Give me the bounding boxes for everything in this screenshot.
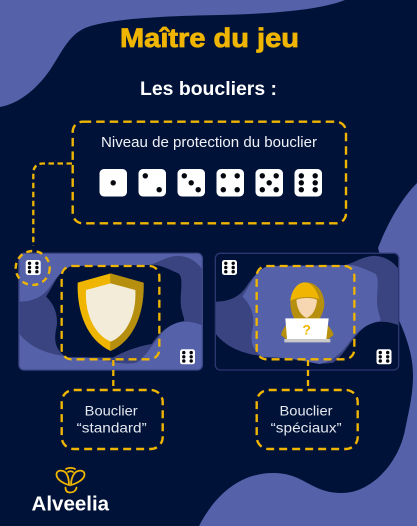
callout: special shield — [257, 390, 358, 449]
panel: special shield card — [215, 253, 399, 370]
icon: die badge top-left — [16, 251, 50, 285]
logo: Alveelia: Alveelia — [32, 494, 110, 516]
panel heading: Niveau de protection du bouclier — [101, 135, 317, 151]
die 5 — [256, 169, 283, 196]
blob: right and bottom — [199, 183, 417, 526]
callout: special shield: Bouclier — [280, 403, 333, 419]
icon: hooded hacker: ? — [302, 321, 311, 337]
callout: standard shield — [62, 390, 163, 449]
icon: die top-left card 2 — [222, 260, 237, 275]
panel: standard shield card — [19, 253, 202, 370]
dashed frame: hacker — [257, 266, 354, 359]
die 2 — [138, 169, 166, 196]
subtitle: Les boucliers : — [140, 78, 277, 100]
arrow: connector to die badge — [33, 164, 72, 246]
panel: protection level — [73, 122, 346, 223]
icon: bee — [56, 468, 84, 492]
die 1 — [100, 169, 127, 196]
dashed frame: shield — [62, 266, 159, 359]
blob: top left — [0, 0, 345, 107]
die 3 — [178, 169, 205, 196]
callout: special shield: “spéciaux” — [271, 419, 342, 435]
icon: die bottom-right — [180, 349, 195, 364]
title: Maître du jeu — [120, 23, 299, 53]
callout: standard shield: “standard” — [77, 419, 147, 435]
die 6 — [294, 169, 322, 196]
logo: Alveelia — [32, 468, 110, 516]
arrow: connector standard — [112, 360, 114, 390]
callout: standard shield: Bouclier — [85, 403, 138, 419]
die 4 — [216, 169, 244, 196]
icon: die bottom-right card 2 — [376, 349, 392, 364]
icon: shield — [78, 273, 144, 351]
arrow: connector special — [307, 360, 309, 390]
icon: hooded hacker — [281, 282, 334, 342]
